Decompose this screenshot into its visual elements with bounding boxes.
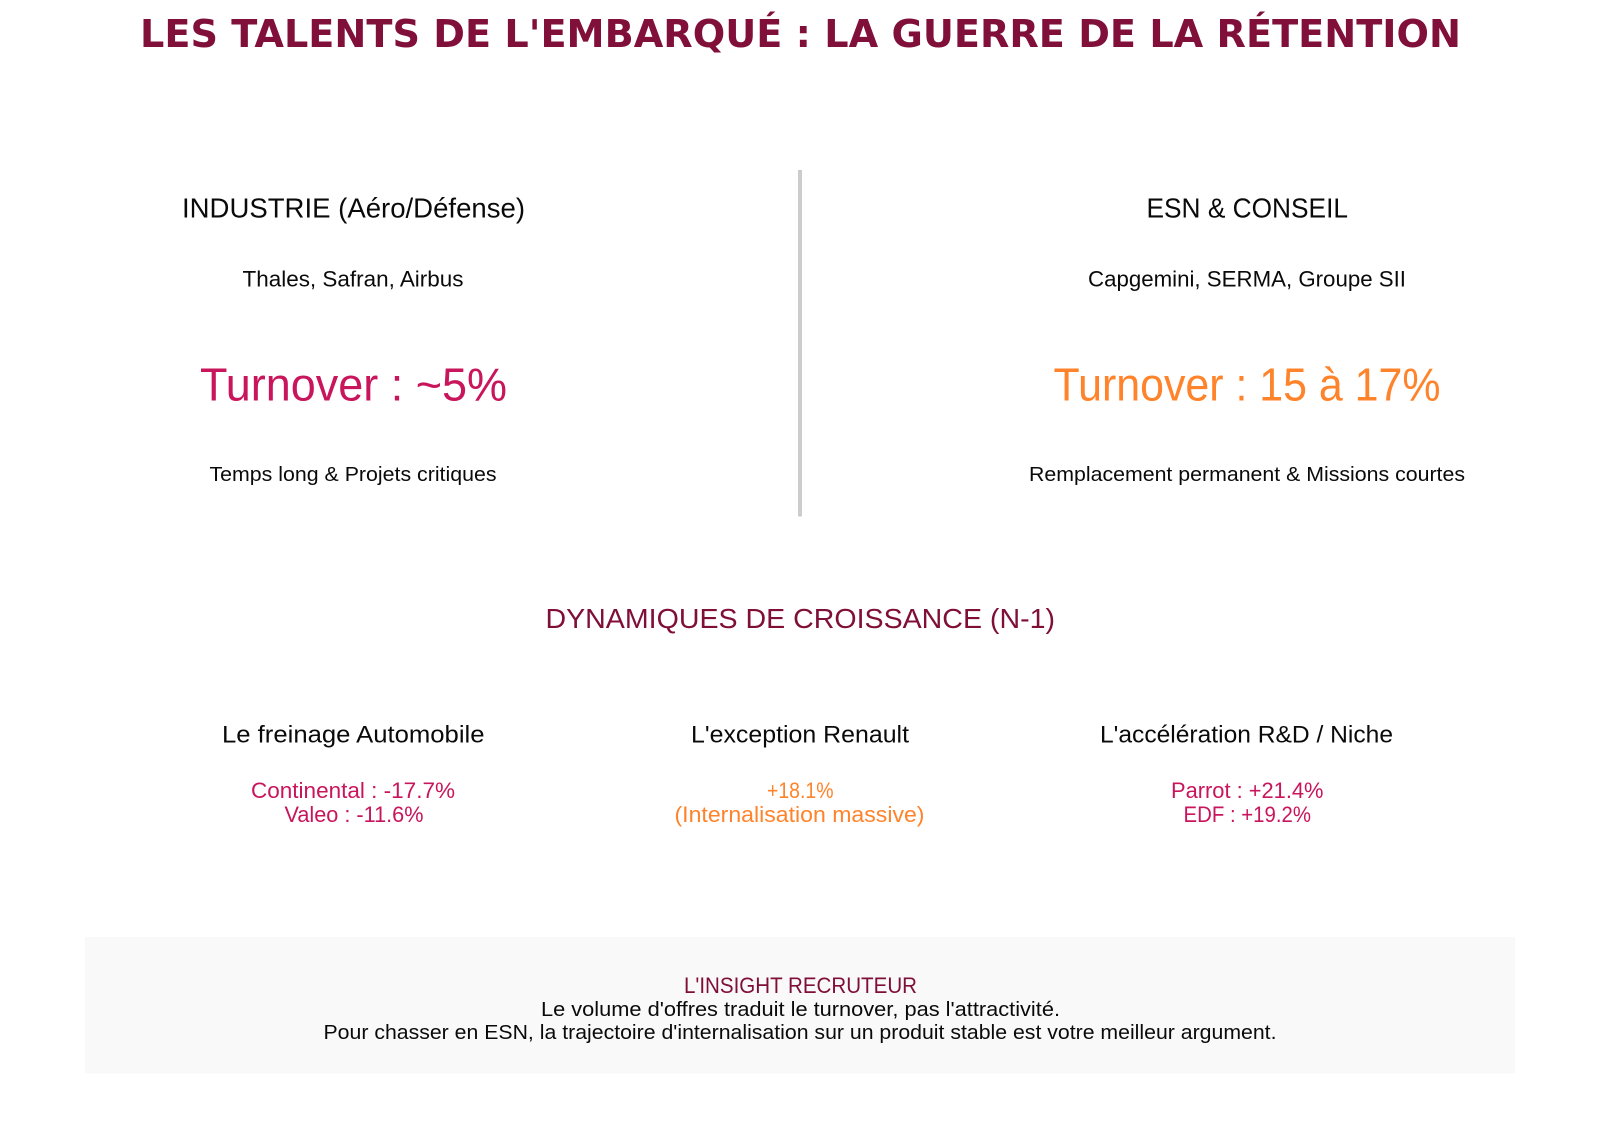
stat: turnover industrie: Turnover : ~5%: [200, 358, 507, 410]
vertical divider: [798, 170, 802, 516]
figures: renault: +18.1%: [767, 778, 834, 803]
column: renault: [674, 722, 924, 827]
stat: turnover esn: Turnover : 15 à 17%: [1054, 358, 1440, 410]
figures: r&d: EDF : +19.2%: [1184, 802, 1311, 827]
subheading: automobile: Le freinage Automobile: [222, 722, 484, 748]
column: automobile: [222, 722, 484, 827]
column: r&d: [1100, 722, 1393, 827]
heading: industrie: INDUSTRIE (Aéro/Défense): [182, 192, 525, 224]
panel: insight: [85, 937, 1515, 1074]
insight text: Le volume d'offres traduit le turnover, pas l'attractivité.: [541, 998, 1060, 1021]
panel: esn: [1029, 192, 1465, 486]
section heading: dynamiques: DYNAMIQUES DE CROISSANCE (N-1): [546, 603, 1055, 634]
subheading: r&d: L'accélération R&D / Niche: [1100, 722, 1393, 748]
subheading: renault: L'exception Renault: [691, 722, 909, 748]
text: caption industrie: Temps long & Projets critiques: [210, 463, 496, 486]
heading: esn: ESN & CONSEIL: [1146, 192, 1348, 224]
figures: r&d: Parrot : +21.4%: [1171, 778, 1324, 803]
panel: industrie: [182, 192, 525, 486]
text: companies: Thales, Safran, Airbus: [242, 266, 464, 292]
figures: automobile: Valeo : -11.6%: [284, 802, 424, 827]
title: LES TALENTS DE L'EMBARQUÉ : LA GUERRE DE LA RÉTENTION: [140, 12, 1461, 56]
insight text: Pour chasser en ESN, la trajectoire d'internalisation sur un produit stable est votre meilleur argument.: [324, 1021, 1276, 1044]
text: caption esn: Remplacement permanent & Missions courtes: [1029, 463, 1465, 486]
insight background: [85, 937, 1515, 1074]
text: esn companies: Capgemini, SERMA, Groupe SII: [1088, 266, 1406, 292]
insight heading: L'INSIGHT RECRUTEUR: [684, 973, 917, 998]
figures: renault: (Internalisation massive): [674, 802, 924, 827]
figures: automobile: Continental : -17.7%: [251, 778, 455, 803]
